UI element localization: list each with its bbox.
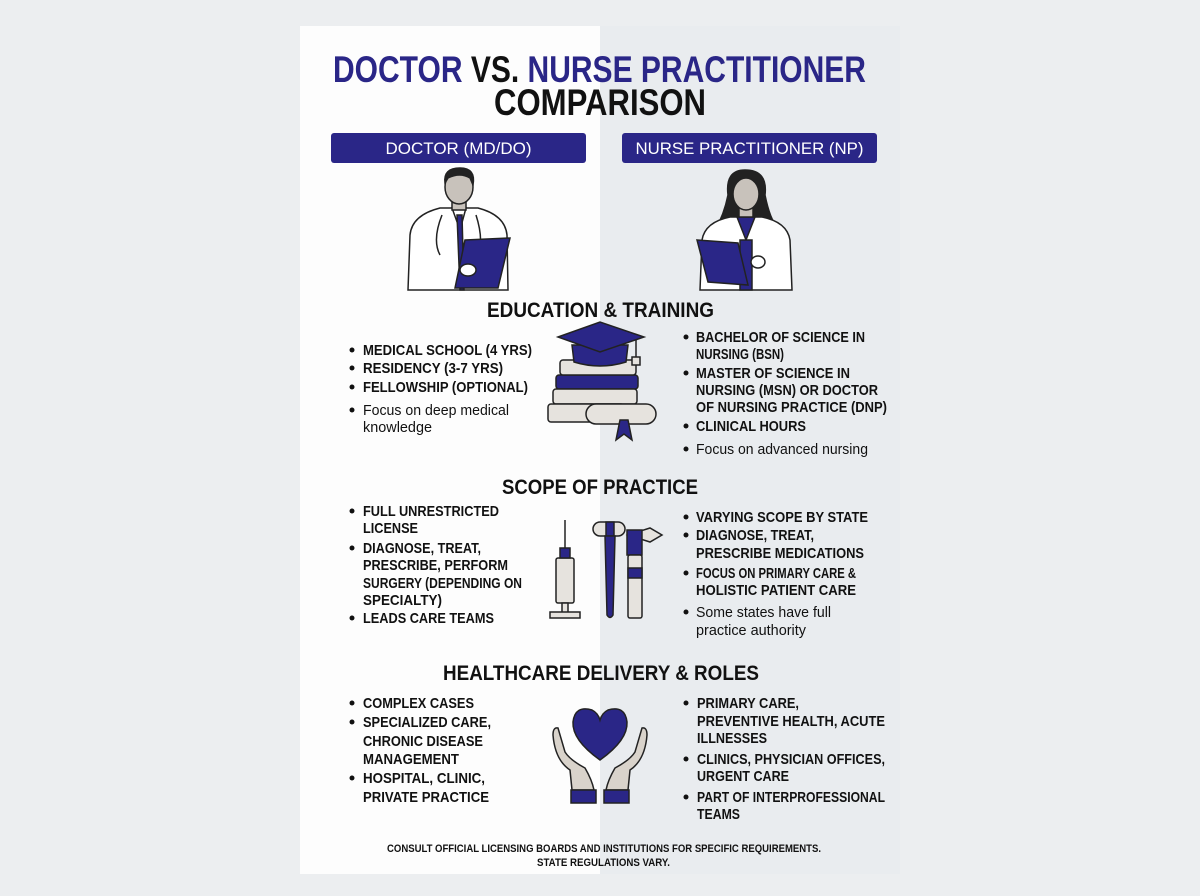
title (333, 49, 866, 123)
list: doctor education: FELLOWSHIP (OPTIONAL) (363, 379, 528, 396)
list: NP delivery: PRIMARY CARE, (697, 695, 799, 712)
list: doctor delivery: CHRONIC DISEASE (363, 733, 483, 750)
list: NP scope: practice authority (696, 622, 806, 639)
list: doctor scope (350, 503, 522, 627)
list: NP education: CLINICAL HOURS (696, 418, 806, 435)
list: NP delivery: URGENT CARE (697, 768, 789, 785)
icon: syringe (550, 520, 580, 618)
list: doctor education: knowledge (363, 419, 432, 436)
list: doctor delivery: HOSPITAL, CLINIC, (363, 770, 485, 787)
list: NP education: MASTER OF SCIENCE IN (696, 365, 850, 382)
footer note: CONSULT OFFICIAL LICENSING BOARDS AND INSTITUTIONS FOR SPECIFIC REQUIREMENTS. (387, 843, 821, 855)
list: NP education: OF NURSING PRACTICE (DNP) (696, 399, 887, 416)
heading: healthcare delivery & roles: HEALTHCARE DELIVERY & ROLES (443, 662, 759, 685)
header: doctor (331, 133, 586, 163)
list: doctor scope: FULL UNRESTRICTED (363, 503, 499, 520)
list: NP education (684, 329, 887, 458)
header: doctor: DOCTOR (MD/DO) (386, 139, 532, 158)
list: NP delivery: TEAMS (697, 806, 740, 823)
list: doctor delivery: PRIVATE PRACTICE (363, 789, 489, 806)
list: NP education: Focus on advanced nursing (696, 441, 868, 458)
icon: doctor figure (408, 168, 510, 290)
poster panel (300, 26, 900, 874)
list: NP education: NURSING (MSN) OR DOCTOR (696, 382, 878, 399)
header: nurse practitioner: NURSE PRACTITIONER (NP) (636, 139, 864, 158)
list: doctor scope: PRESCRIBE, PERFORM (363, 557, 508, 574)
list: doctor education: Focus on deep medical (363, 402, 509, 419)
title: COMPARISON (494, 82, 706, 123)
heading: scope of practice: SCOPE OF PRACTICE (502, 476, 698, 499)
list: NP scope: PRESCRIBE MEDICATIONS (696, 545, 864, 562)
list: doctor delivery: MANAGEMENT (363, 751, 459, 768)
list: NP scope: HOLISTIC PATIENT CARE (696, 582, 856, 599)
list: NP scope: FOCUS ON PRIMARY CARE & (696, 565, 856, 582)
list: NP delivery: ILLNESSES (697, 730, 767, 747)
icon: heart in hands (553, 709, 647, 803)
footer note: STATE REGULATIONS VARY. (537, 857, 670, 869)
list: NP scope (684, 509, 868, 639)
list: NP delivery (684, 695, 885, 823)
list: doctor scope: SURGERY (DEPENDING ON (363, 575, 522, 592)
header: nurse practitioner (622, 133, 877, 163)
list: NP education: BACHELOR OF SCIENCE IN (696, 329, 865, 346)
list: doctor delivery: COMPLEX CASES (363, 695, 474, 712)
list: doctor education (350, 342, 532, 436)
list: doctor delivery (350, 695, 491, 806)
list: NP delivery: PART OF INTERPROFESSIONAL (697, 789, 885, 806)
list: doctor scope: LEADS CARE TEAMS (363, 610, 494, 627)
list: NP scope: DIAGNOSE, TREAT, (696, 527, 814, 544)
list: NP delivery: PREVENTIVE HEALTH, ACUTE (697, 713, 885, 730)
icon: otoscope (627, 528, 662, 618)
list: doctor delivery: SPECIALIZED CARE, (363, 714, 491, 731)
list: doctor education: MEDICAL SCHOOL (4 YRS) (363, 342, 532, 359)
list: doctor scope: LICENSE (363, 520, 418, 537)
footer note (387, 843, 821, 869)
list: doctor education: RESIDENCY (3-7 YRS) (363, 360, 503, 377)
heading: education & training: EDUCATION & TRAINING (487, 299, 714, 322)
list: NP scope: VARYING SCOPE BY STATE (696, 509, 868, 526)
icon: nurse figure (697, 170, 792, 290)
list: doctor scope: SPECIALTY) (363, 592, 442, 609)
list: doctor scope: DIAGNOSE, TREAT, (363, 540, 481, 557)
list: NP scope: Some states have full (696, 604, 831, 621)
icon: reflex hammer (593, 522, 625, 618)
list: NP delivery: CLINICS, PHYSICIAN OFFICES, (697, 751, 885, 768)
list: NP education: NURSING (BSN) (696, 346, 784, 363)
title: DOCTOR VS. NURSE PRACTITIONER (333, 49, 866, 90)
icon: books and graduation cap (548, 322, 656, 440)
